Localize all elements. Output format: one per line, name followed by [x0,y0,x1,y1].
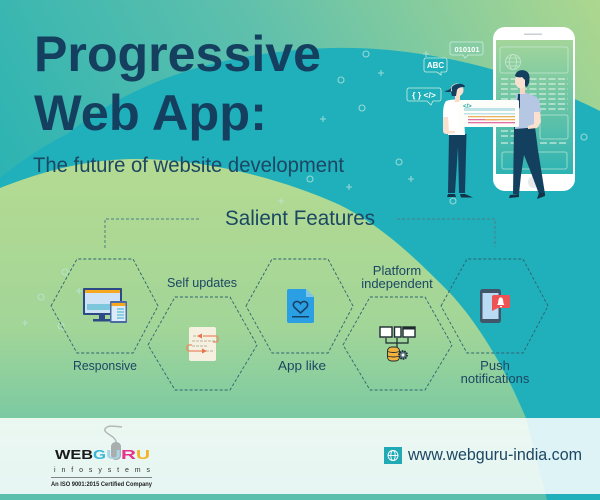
url: www.webguru-india.com [407,445,582,464]
certification: An ISO 9001:2015 Certified Company [51,481,152,488]
label: App like [278,358,326,373]
icon: devices and database [380,327,415,361]
wordmark: U [136,448,150,462]
logo: Webguru Infosystems [51,426,152,488]
wordmark: R [121,448,136,462]
hexagon feature: Push notifications [441,259,548,386]
icon: document with arrows [187,327,218,361]
icon: desktop and tablet [83,288,127,323]
hexagon feature: App like [246,259,353,373]
heading: Salient Features: Salient Features [225,206,375,230]
hexagon feature: Responsive [51,259,158,373]
man [509,70,545,199]
hexagon feature: Platform independent [343,263,452,390]
speech bubble: ABC [424,58,447,75]
icon: app document with heart [287,289,314,323]
title: Web App: [34,85,267,141]
speech bubble: 010101: 010101 [454,45,480,54]
label: Responsive [73,358,137,373]
wordmark [55,448,150,462]
wordmark: WEB [55,448,93,462]
speech bubble: ABC: ABC [427,61,444,70]
tagline: i n f o s y s t e m s [54,467,150,474]
speech bubble: code [407,88,441,105]
phone [493,27,575,191]
website link [384,445,582,464]
hexagon feature: Self updates [148,275,257,390]
label: Platform [373,263,421,278]
icon: phone with notification bell [480,289,510,323]
title: Progressive [34,26,321,82]
label: notifications [461,371,530,386]
title [34,26,321,141]
icon: globe [384,447,402,464]
label: independent [361,276,433,291]
footer band [0,418,600,494]
speech bubble: 010101 [450,42,483,58]
wordmark: U [106,448,121,462]
wordmark: G [93,448,106,462]
illustration: phone and two people [407,27,575,199]
board [459,100,519,127]
dashed bracket [105,219,495,248]
label: Push [480,358,510,373]
mouse icon [105,426,122,460]
woman [443,84,473,198]
board: </> [463,104,472,110]
subtitle: The future of website development [33,154,344,177]
label: Self updates [167,275,237,290]
decorative circles and plus signs [22,51,587,329]
speech bubble: code: { } </> [412,90,436,100]
